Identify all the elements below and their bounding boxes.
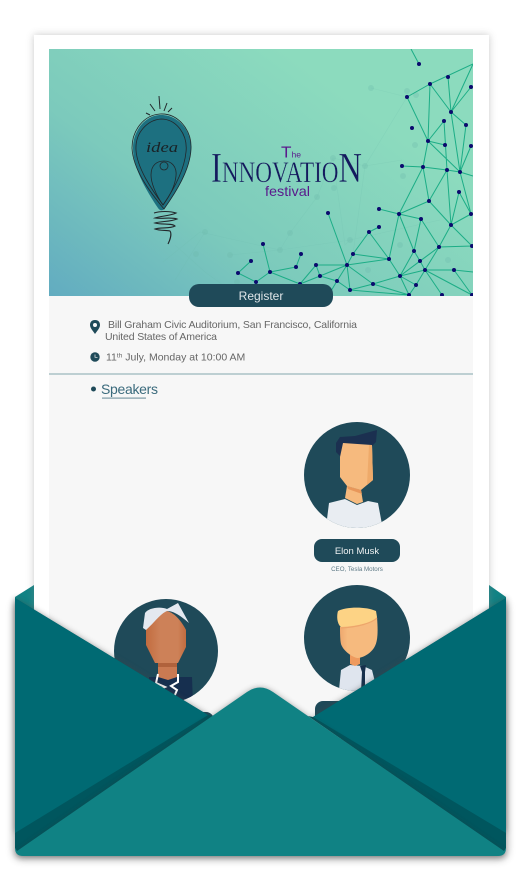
register button: Register bbox=[239, 289, 283, 303]
date and time: 11 bbox=[106, 352, 117, 364]
envelope front flap bbox=[15, 688, 506, 856]
network nodes bbox=[236, 62, 474, 297]
speaker: Elon Musk bbox=[304, 422, 410, 535]
date and time: July, Monday at 10:00 AM bbox=[122, 352, 245, 364]
title: The Innovation festival: The bbox=[281, 144, 302, 162]
envelope back bbox=[14, 585, 507, 859]
icon: light bulb: idea bbox=[146, 140, 178, 156]
hidden speaker name pills bbox=[128, 701, 401, 735]
speaker name pill bbox=[314, 539, 400, 562]
speaker title: CEO, Tesla Motors bbox=[331, 566, 383, 573]
venue address: United States of America bbox=[105, 331, 217, 343]
divider bbox=[49, 373, 473, 375]
title: The Innovation festival: festival bbox=[265, 183, 310, 199]
date and time: th bbox=[117, 352, 123, 360]
register button bbox=[189, 284, 333, 307]
envelope left flap bbox=[15, 598, 213, 852]
speaker name pill: Elon Musk bbox=[335, 546, 379, 557]
venue address: Bill Graham Civic Auditorium, San Francisco, California bbox=[108, 319, 357, 331]
paper letter bbox=[34, 35, 489, 739]
icon: location pin bbox=[90, 320, 100, 334]
network lines bbox=[238, 49, 473, 296]
title: The Innovation festival: INNOVATION bbox=[211, 146, 362, 192]
venue address bbox=[105, 319, 357, 343]
speaker: right portrait bbox=[304, 585, 410, 695]
envelope right flap bbox=[308, 598, 506, 852]
faint background network bbox=[204, 49, 473, 296]
speaker: left portrait bbox=[114, 599, 218, 705]
speakers heading: Speakers bbox=[101, 381, 158, 397]
icon: light bulb bbox=[132, 96, 191, 244]
icon: clock bbox=[90, 352, 100, 362]
banner bbox=[49, 49, 474, 297]
